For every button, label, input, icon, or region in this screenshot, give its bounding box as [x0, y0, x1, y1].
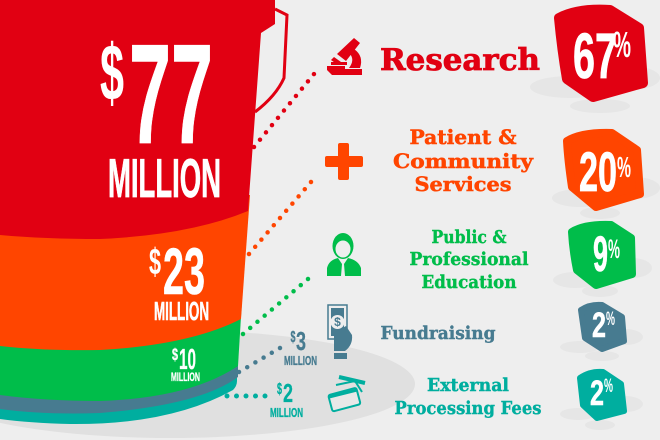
badge: 67%: [530, 10, 660, 113]
badge: fundraising 2%: [560, 305, 643, 361]
amount: $10 million: $: [172, 345, 178, 364]
shadow under cup: [0, 330, 415, 438]
icon: hand with banknote: $: [334, 315, 341, 329]
amount: $3 million: $: [290, 329, 296, 346]
orange segment: [0, 195, 250, 350]
badge: 67%: 67: [573, 20, 617, 92]
icon: medical cross: [327, 145, 361, 178]
label: public and professional education: Public &: [432, 227, 506, 248]
badge: fundraising 2%: %: [606, 309, 615, 330]
stacked cup chart: [0, 0, 287, 424]
label: public and professional education: Professional: [410, 249, 529, 270]
badge: 20%: 20: [579, 140, 617, 203]
icon: person: [327, 233, 361, 276]
icon: hand with banknote: [328, 305, 352, 359]
badge: 9%: 9: [593, 226, 608, 282]
amount: $10 million: MILLION: [171, 372, 200, 384]
label: patient and community services: Patient &: [410, 125, 516, 149]
label: patient and community services: [393, 125, 534, 196]
amount: $77 million: [100, 15, 221, 209]
label: public and professional education: Education: [422, 272, 516, 293]
amount: $23 million: MILLION: [154, 296, 209, 326]
amount: $2 million: $: [277, 381, 282, 398]
label: fundraising: Fundraising: [380, 323, 496, 344]
amount: $10 million: 10: [179, 344, 196, 376]
badge: processing fees 2%: [560, 372, 643, 430]
amount: $2 million: MILLION: [270, 406, 303, 420]
badge: 20%: [552, 133, 660, 219]
amount: $10 million: [171, 344, 200, 384]
slate segment: [0, 350, 238, 414]
icon: credit cards: [328, 377, 365, 412]
badge: 9%: [553, 225, 652, 297]
amount: $3 million: 3: [296, 326, 306, 356]
badge: 67%: %: [613, 24, 631, 65]
label: external processing fees: External: [427, 375, 509, 396]
badge: processing fees 2%: %: [604, 376, 613, 397]
amount: $3 million: MILLION: [284, 354, 317, 368]
amount: $2 million: [270, 378, 303, 420]
dotted connector: public education: [243, 279, 308, 334]
badge: 20%: %: [617, 152, 631, 184]
dotted connector: research: [254, 74, 314, 147]
badge: 9%: %: [608, 234, 620, 264]
label: external processing fees: [394, 375, 542, 419]
label: patient and community services: Services: [414, 172, 512, 196]
cup handle: [255, 9, 287, 112]
text: MILLION: [108, 147, 221, 209]
amount: $77 million: 77: [129, 15, 213, 174]
amount: $3 million: [284, 326, 317, 368]
amount: $23 million: $: [149, 241, 161, 282]
dotted connector: processing fees: [227, 394, 266, 398]
label: patient and community services: Community: [393, 149, 534, 173]
badge: processing fees 2%: 2: [590, 374, 604, 413]
red segment: [0, 0, 275, 239]
teal segment: [0, 360, 237, 424]
dotted connector: patient services: [249, 182, 311, 254]
label: research: Research: [380, 43, 540, 78]
dotted connector: fundraising: [239, 348, 280, 372]
amount: $23 million: 23: [163, 234, 205, 308]
badge: fundraising 2%: 2: [592, 306, 606, 345]
amount: $77 million: $: [100, 28, 124, 117]
amount: $2 million: 2: [283, 378, 293, 408]
amount: $23 million: [149, 234, 209, 326]
label: public and professional education: [410, 227, 529, 293]
icon: microscope: [327, 38, 362, 75]
label: external processing fees: Processing Fees: [394, 398, 542, 419]
green segment: [0, 300, 242, 401]
